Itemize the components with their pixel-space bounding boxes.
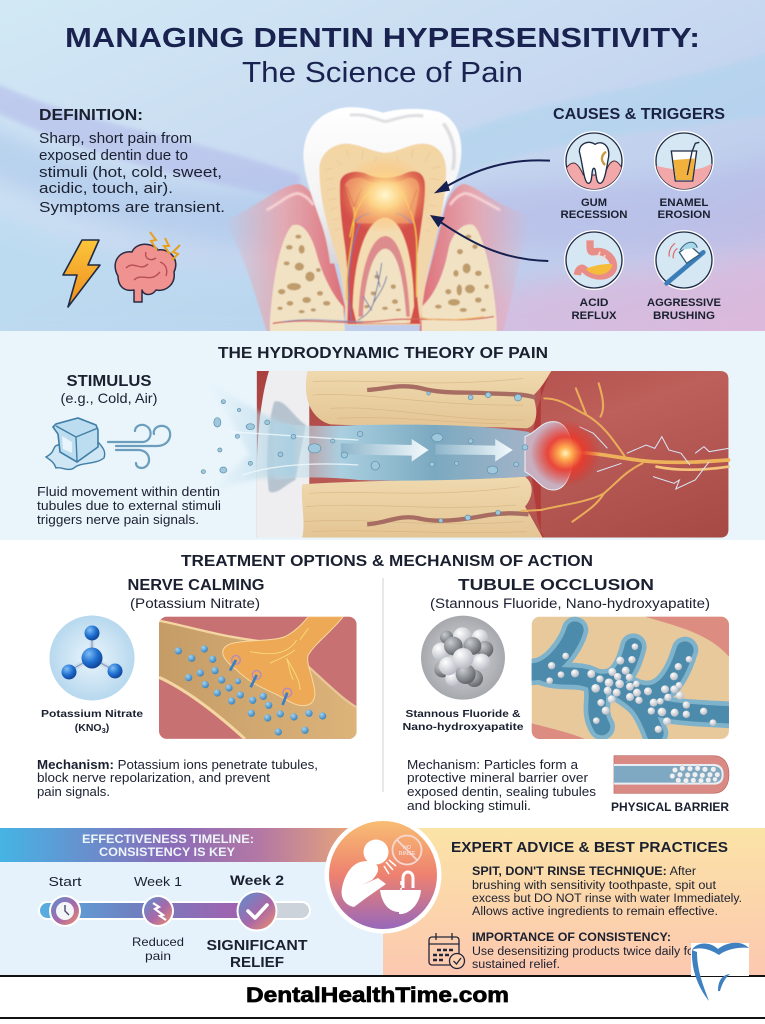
tubule occlusion heading: (Stannous Fluoride, Nano-hydroxyapatite) — [430, 596, 710, 611]
section heading: TREATMENT OPTIONS & MECHANISM OF ACTION — [181, 553, 593, 570]
nerve calming heading — [128, 577, 264, 611]
mechanism text: nerve calming: pain signals. — [37, 785, 110, 799]
tooth cross-section illustration — [223, 107, 530, 332]
potassium nitrate label: 3 — [102, 726, 106, 735]
tubule illustration — [201, 371, 728, 538]
electric sparks — [579, 427, 728, 489]
fluid canal — [284, 424, 531, 481]
causes labels: ACID — [580, 297, 609, 309]
timeline header band: CONSISTENCY IS KEY — [99, 847, 235, 859]
timeline labels: Start — [48, 874, 82, 889]
definition text block: acidic, touch, air). — [39, 181, 173, 197]
timeline progress bar — [38, 901, 311, 920]
nerve ending — [223, 617, 343, 706]
bulb at nerve — [525, 422, 572, 490]
panel: expert advice — [324, 816, 765, 975]
causes labels: RECESSION — [560, 209, 628, 221]
occluding particles — [546, 643, 716, 733]
enamel crown — [303, 107, 461, 263]
icon: spit don't rinse badge: NO — [403, 845, 412, 851]
potassium nitrate label: ) — [106, 722, 109, 734]
causes labels — [560, 197, 721, 322]
potassium nitrate label — [41, 708, 143, 735]
potassium ions — [175, 645, 326, 736]
section background — [0, 331, 765, 540]
logo: dental tooth mark — [691, 943, 749, 1001]
causes and triggers heading: CAUSES & TRIGGERS — [553, 106, 725, 123]
title: MANAGING DENTIN HYPERSENSITIVITY: — [65, 22, 700, 53]
icon: wind — [108, 425, 170, 468]
icon: gum recession — [564, 131, 624, 192]
timeline background — [0, 862, 383, 975]
icon: mineral particle cluster — [421, 616, 505, 700]
dentin lower — [302, 477, 543, 538]
icon: spit don't rinse badge — [324, 816, 442, 934]
mechanism text: tubule occlusion — [407, 758, 596, 813]
icon: spit don't rinse badge: RINSE — [399, 851, 416, 857]
flow arrows — [341, 439, 513, 462]
timeline labels: Week 1 — [134, 874, 182, 889]
stimulus label: (e.g., Cold, Air) — [60, 390, 158, 406]
consistency text: Use desensitizing products twice daily for — [472, 946, 698, 958]
spit don't rinse text — [472, 866, 742, 918]
icon: enamel erosion — [654, 131, 714, 192]
timeline labels — [48, 873, 308, 971]
causes labels: ENAMEL — [660, 197, 709, 209]
causes labels: REFLUX — [572, 310, 617, 322]
consistency text: sustained relief. — [472, 959, 560, 971]
mechanism text: tubule occlusion: and blocking stimuli. — [407, 799, 531, 813]
blue channels — [528, 630, 732, 733]
icon: lightning bolt — [63, 240, 100, 307]
spit don't rinse text: excess but DO NOT rinse with water Immediately. — [472, 893, 742, 905]
bone — [270, 224, 497, 332]
mechanism text: tubule occlusion: exposed dentin, sealing tubules — [407, 785, 596, 799]
expert heading: EXPERT ADVICE & BEST PRACTICES — [451, 840, 728, 856]
fluid droplets — [201, 392, 528, 523]
receptors — [230, 656, 292, 705]
icon: potassium nitrate molecule — [50, 616, 134, 700]
gums — [223, 184, 530, 332]
expert background — [383, 828, 765, 975]
stimulus description: tubules due to external stimuli — [37, 499, 221, 513]
causes labels: AGGRESSIVE — [647, 297, 721, 309]
definition text block: DEFINITION: — [39, 107, 143, 124]
timeline header band — [0, 828, 383, 862]
pain glow — [340, 157, 430, 233]
enamel — [256, 371, 309, 538]
arrow: gum recession to tooth — [434, 160, 550, 193]
causes labels: BRUSHING — [653, 310, 715, 322]
title: The Science of Pain — [242, 57, 523, 89]
timeline header band: EFFECTIVENESS TIMELINE: — [82, 834, 254, 846]
mechanism text: tubule occlusion: Mechanism: Particles form a — [407, 758, 578, 772]
definition text block — [39, 107, 225, 216]
section heading: THE HYDRODYNAMIC THEORY OF PAIN — [218, 345, 548, 362]
side tubules — [367, 386, 536, 398]
icon: calendar — [429, 933, 464, 968]
mechanism text: nerve calming — [37, 758, 318, 799]
physical barrier diagram — [614, 756, 729, 793]
dentin band — [159, 621, 357, 739]
stimulus description: triggers nerve pain signals. — [37, 513, 199, 527]
definition text block: exposed dentin due to — [39, 148, 188, 164]
dentin upper — [306, 371, 551, 428]
potassium nitrate label: Potassium Nitrate — [41, 708, 143, 720]
air spray — [208, 382, 295, 492]
nerve calming heading: NERVE CALMING — [128, 577, 264, 594]
timeline labels: RELIEF — [230, 955, 284, 971]
pulp nerves — [273, 187, 493, 323]
timeline node: week 1 — [142, 895, 174, 927]
spit don't rinse text: Allows active ingredients to remain effective. — [472, 906, 718, 918]
panel: effectiveness timeline — [0, 828, 383, 975]
stimulus label — [60, 373, 158, 406]
panel: header and tooth overview — [0, 0, 765, 340]
tubule occlusion heading — [430, 577, 710, 611]
timeline labels: Week 2 — [230, 873, 284, 888]
panel: hydrodynamic theory — [0, 331, 765, 540]
mechanism text: tubule occlusion: protective mineral barrier over — [407, 771, 588, 785]
nerve pain glow — [530, 420, 600, 487]
definition text block: stimuli (hot, cold, sweet, — [39, 165, 222, 181]
mechanism text: nerve calming: block nerve repolarization, and prevent — [37, 771, 271, 785]
dentin — [319, 144, 446, 325]
potassium nitrate label: (KNO — [75, 722, 102, 734]
timeline labels: SIGNIFICANT — [206, 938, 308, 954]
nerve calming illustration — [159, 617, 357, 739]
spit don't rinse text: SPIT, DON'T RINSE TECHNIQUE: After — [472, 866, 696, 878]
timeline labels: pain — [145, 949, 171, 963]
consistency text — [472, 932, 698, 971]
arrow: acid reflux to tooth — [430, 215, 548, 261]
timeline node: week 2 check — [236, 890, 278, 932]
particle label: Nano-hydroxyapatite — [402, 721, 524, 733]
nerve calming heading: (Potassium Nitrate) — [130, 596, 260, 611]
pulp chamber and canals — [340, 171, 425, 324]
header background with waves — [0, 0, 765, 340]
spit don't rinse text: brushing with sensitivity toothpaste, spit out — [472, 880, 717, 892]
definition text block: Sharp, short pain from — [39, 131, 192, 147]
dentin texture — [304, 378, 527, 533]
panel: causes icons — [564, 131, 714, 290]
stimulus label: STIMULUS — [66, 373, 152, 390]
icon: acid reflux — [564, 230, 624, 290]
causes labels: GUM — [581, 197, 607, 209]
icon: aggressive brushing — [654, 230, 714, 290]
stimulus description: Fluid movement within dentin — [37, 485, 220, 499]
timeline labels: Reduced — [132, 935, 184, 949]
icon: melting ice cube — [46, 418, 105, 469]
particle label — [402, 708, 524, 733]
physical barrier label: PHYSICAL BARRIER — [611, 802, 730, 814]
consistency text: IMPORTANCE OF CONSISTENCY: — [472, 932, 671, 944]
dentin tubule lines — [325, 148, 440, 232]
causes labels: EROSION — [658, 209, 711, 221]
particle label: Stannous Fluoride & — [406, 708, 521, 720]
panel: treatment options — [37, 553, 732, 814]
definition text block: Symptoms are transient. — [39, 200, 225, 216]
image base — [256, 371, 728, 538]
nerve fibres — [522, 383, 728, 522]
icon: brain with sparks — [115, 232, 180, 302]
stimulus description — [37, 485, 221, 527]
timeline node: start clock — [49, 895, 81, 927]
footer website: DentalHealthTime.com — [246, 984, 509, 1007]
inner dentin arch — [353, 218, 414, 323]
title — [65, 22, 700, 89]
mechanism text: nerve calming: Mechanism: Potassium ions penetrate tubules, — [37, 758, 318, 772]
tubule occlusion heading: TUBULE OCCLUSION — [458, 577, 654, 594]
tubule occlusion illustration — [528, 617, 732, 739]
